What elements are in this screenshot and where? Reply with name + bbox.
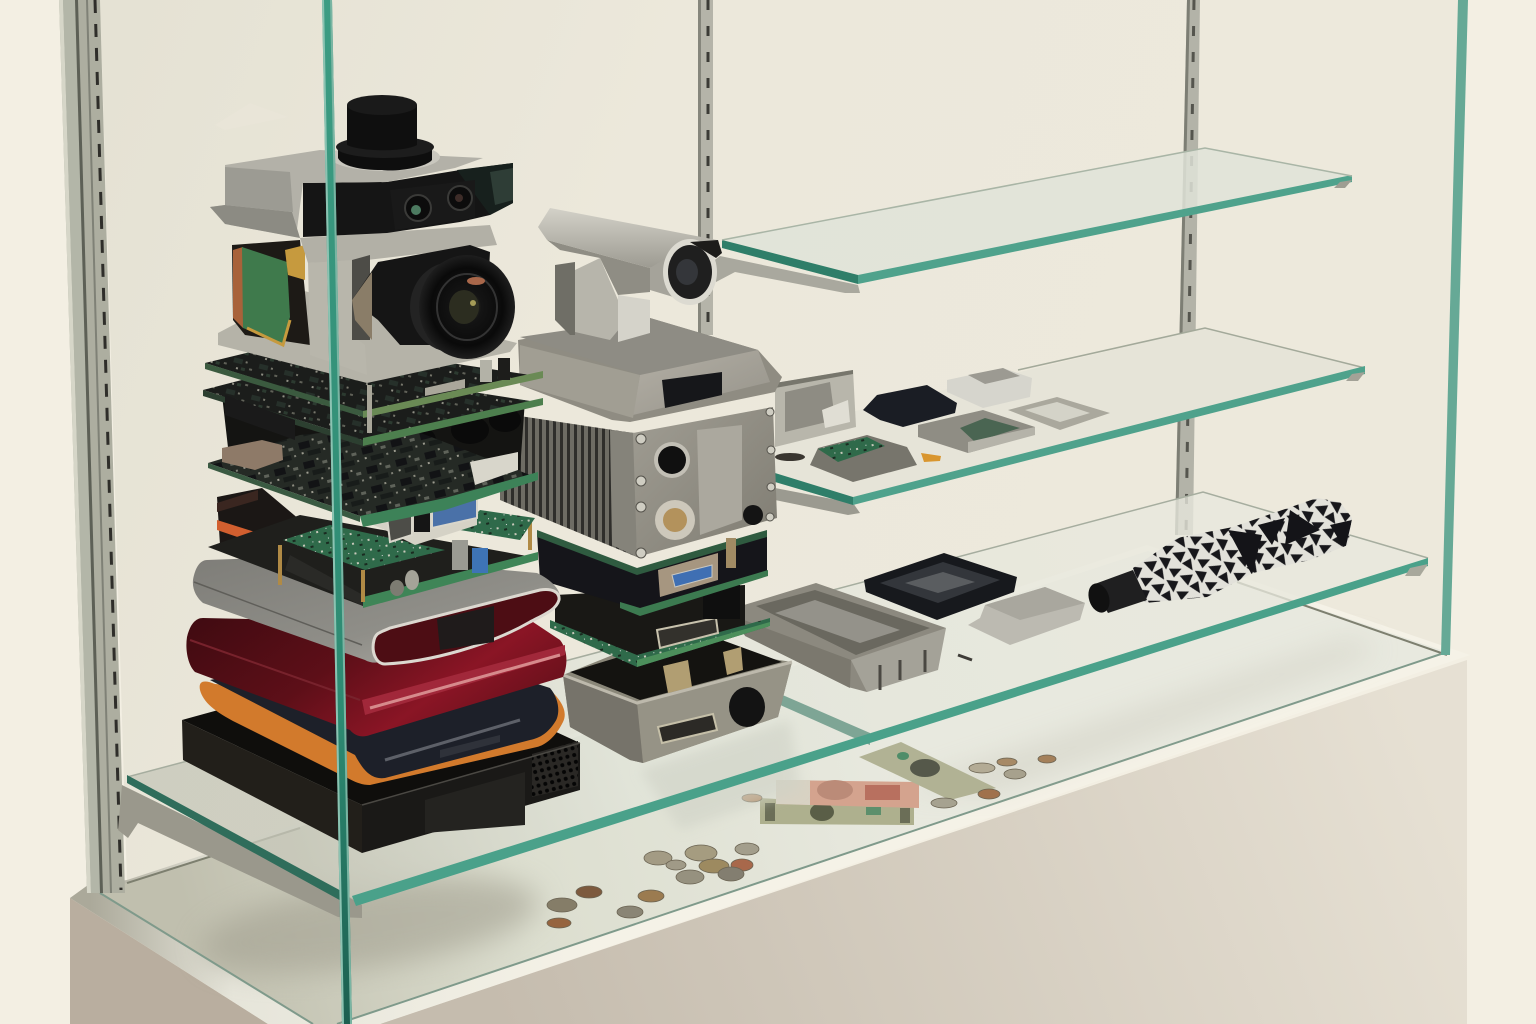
lower PCB with ports — [208, 488, 538, 608]
circuit board A — [205, 340, 543, 433]
coins — [547, 755, 1056, 928]
left stack — [182, 95, 580, 853]
bottom shelf back edge — [127, 492, 1428, 777]
upper dark components — [222, 395, 525, 510]
shelf end bracket — [1405, 564, 1428, 576]
capacitor cylinders — [363, 408, 521, 464]
top sensor head — [210, 150, 513, 238]
glass support edge — [778, 693, 870, 745]
part: silver bracket — [775, 370, 856, 447]
shelf: middle — [775, 328, 1365, 515]
lidar cap — [330, 95, 440, 171]
PTZ security camera — [538, 208, 722, 342]
shelf: top — [712, 148, 1352, 293]
silver cage — [300, 225, 497, 375]
case floor — [100, 551, 1447, 1024]
umbrella — [1085, 498, 1352, 615]
lower boards block — [550, 585, 770, 667]
shadow on floor below stack — [196, 860, 544, 990]
aluminium lid box — [518, 318, 782, 422]
orange portable drive — [200, 640, 565, 785]
floor back edge lines — [127, 582, 1447, 883]
silver block — [968, 587, 1085, 645]
screw — [958, 655, 972, 660]
banknote: dollar lower — [760, 798, 914, 825]
red portable drive — [186, 600, 566, 736]
part: orange fuse — [921, 453, 941, 462]
banknote: dollar upper — [859, 742, 996, 800]
part: PCB module — [810, 435, 917, 482]
finned box — [500, 407, 777, 558]
circuit board C — [208, 425, 538, 527]
camera PCB assembly — [232, 240, 310, 345]
reflections under objects — [640, 720, 800, 830]
floor front glass edge — [100, 652, 1447, 1024]
banknote: red note — [776, 780, 919, 808]
part: white block — [947, 368, 1032, 408]
front-left glass edge — [322, 0, 352, 1024]
VGA connector — [658, 553, 718, 597]
bottom shelf left edge — [127, 775, 345, 903]
glass reflection on back pane — [215, 103, 288, 130]
silver mounting plate — [218, 290, 517, 383]
right stack — [500, 208, 792, 763]
black mini PC base — [182, 660, 580, 853]
back rail centre — [698, 0, 713, 335]
bottom shelf support bracket — [118, 785, 362, 918]
knob — [729, 687, 765, 727]
part: black module — [863, 385, 957, 427]
D-sub connector — [658, 714, 717, 743]
bills and coins on floor — [547, 742, 1056, 928]
part: frame — [1008, 397, 1110, 430]
bottom shelf front edge — [352, 558, 1428, 906]
upper boards block — [537, 530, 768, 616]
case interior backdrop — [100, 0, 1467, 883]
machine vision camera with lens — [352, 245, 515, 359]
pedestal — [70, 545, 1470, 1024]
empty silver tray — [744, 583, 946, 692]
floor shadow under shelf — [900, 640, 1380, 790]
grey portable drive — [193, 555, 560, 664]
back rail right — [1175, 0, 1200, 535]
part: open tray — [918, 410, 1035, 453]
right glass edge — [1441, 0, 1468, 655]
ports block — [282, 465, 477, 545]
part: dark clip — [775, 453, 805, 461]
left upright rail — [59, 0, 125, 893]
shelf: bottom surface — [127, 492, 1428, 898]
middle shelf small parts — [775, 368, 1110, 482]
bottom connector tray — [563, 632, 792, 763]
bottom shelf small parts — [744, 498, 1352, 692]
circuit board B — [203, 365, 543, 446]
black tray — [864, 553, 1017, 620]
